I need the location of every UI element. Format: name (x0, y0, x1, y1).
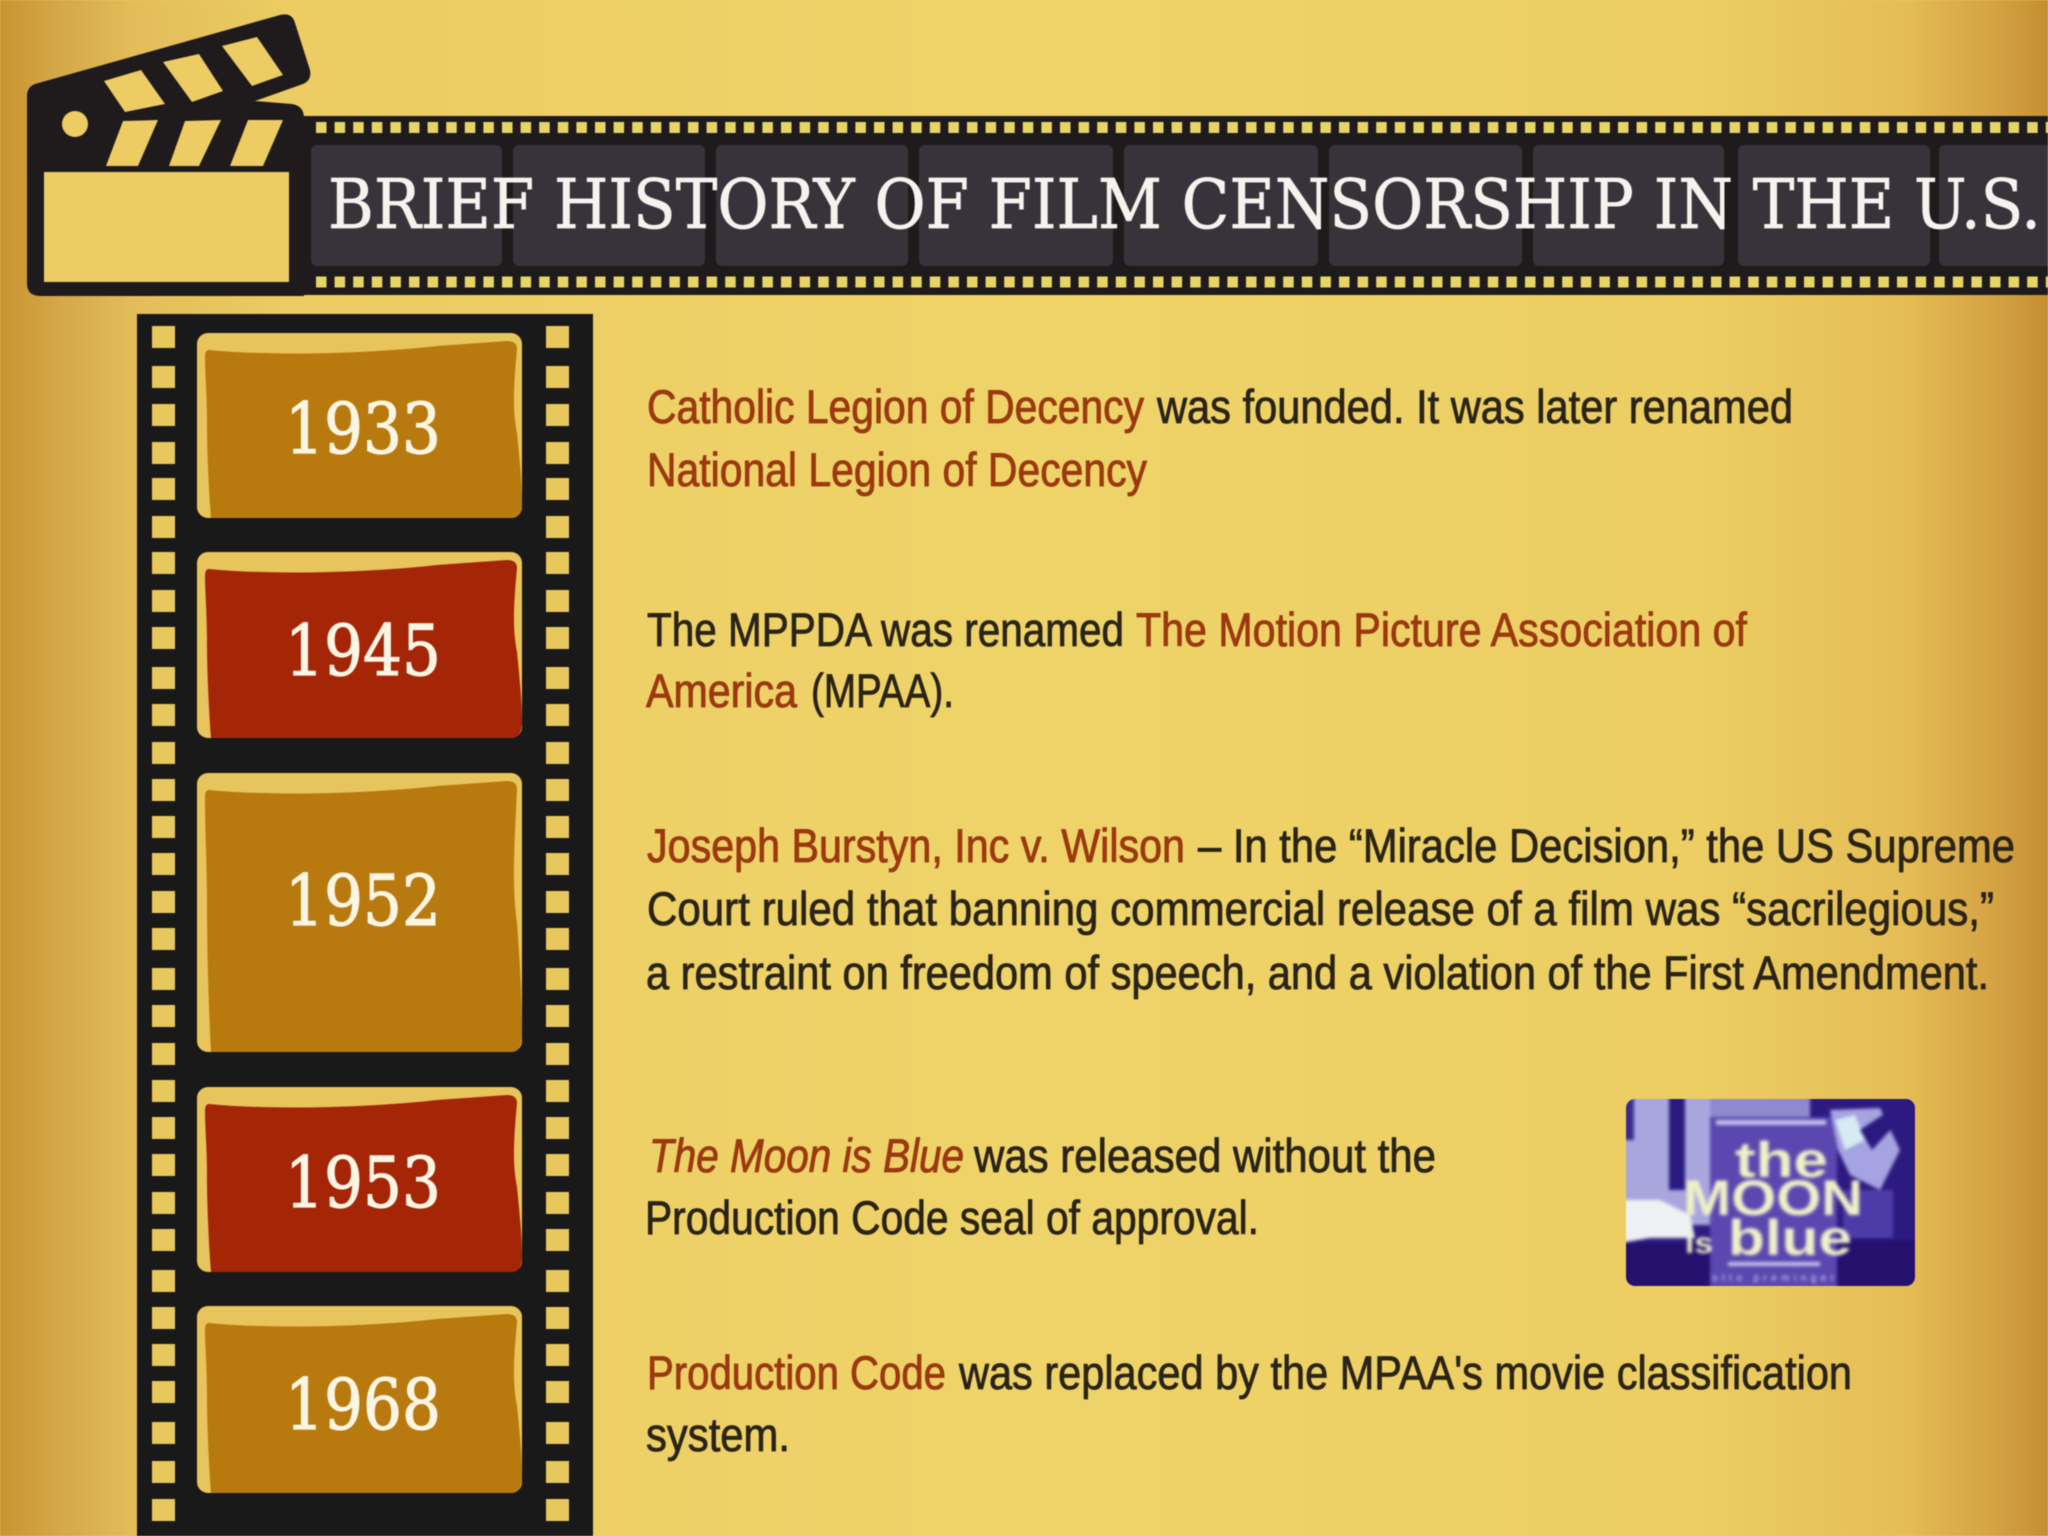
image: The Moon is Blue poster: the (1735, 1132, 1828, 1188)
image: The Moon is Blue poster: blue (1728, 1210, 1852, 1266)
panel: 1953 (197, 1087, 522, 1272)
text block: 1968 entry (646, 1346, 1852, 1461)
text block: 1945 entry: (MPAA). (811, 664, 954, 717)
text block: 1945 entry: The Motion Picture Association of (1136, 603, 1748, 656)
text block: 1968 entry: system. (646, 1408, 790, 1461)
text block: 1968 entry: was replaced by the MPAA's movie classification (958, 1346, 1852, 1399)
image: The Moon is Blue poster: otto preminger (1712, 1273, 1835, 1284)
text block: 1933 entry: was founded. It was later renamed (1156, 380, 1793, 433)
panel: 1945: 1945 (285, 610, 441, 692)
panel: 1933: 1933 (285, 388, 441, 470)
text block: 1945 entry (646, 603, 1748, 717)
image: The Moon is Blue poster (1620, 1095, 1920, 1293)
text block: 1968 entry: Production Code (647, 1346, 946, 1399)
text block: 1953 entry: was released without the (973, 1129, 1436, 1182)
text block: 1953 entry: The Moon is Blue (649, 1129, 964, 1182)
image: The Moon is Blue poster: MOON (1683, 1170, 1863, 1226)
text block: 1953 entry (645, 1129, 1436, 1244)
text block: 1953 entry: Production Code seal of approval. (645, 1191, 1259, 1244)
panel: 1933 (197, 333, 522, 518)
image: The Moon is Blue poster: is (1685, 1227, 1713, 1260)
text block: 1933 entry: Catholic Legion of Decency (647, 380, 1144, 433)
panel: 1945 (197, 552, 522, 738)
panel: 1952 (197, 773, 522, 1052)
panel: 1952: 1952 (285, 860, 441, 942)
text block: 1933 entry (647, 380, 1793, 496)
panel: 1968: 1968 (285, 1364, 441, 1446)
panel: 1968 (197, 1306, 522, 1493)
text block: 1952 entry: Joseph Burstyn, Inc v. Wilson (647, 819, 1185, 872)
icon: film clapperboard (27, 14, 310, 296)
title film strip (300, 116, 2048, 295)
panel: 1953: 1953 (285, 1142, 441, 1224)
text block: 1933 entry: National Legion of Decency (647, 443, 1147, 496)
text block: 1945 entry: America (646, 664, 798, 717)
text block: 1952 entry (646, 819, 2015, 999)
text block: 1945 entry: The MPPDA was renamed (647, 603, 1124, 656)
film strip timeline (137, 314, 593, 1536)
